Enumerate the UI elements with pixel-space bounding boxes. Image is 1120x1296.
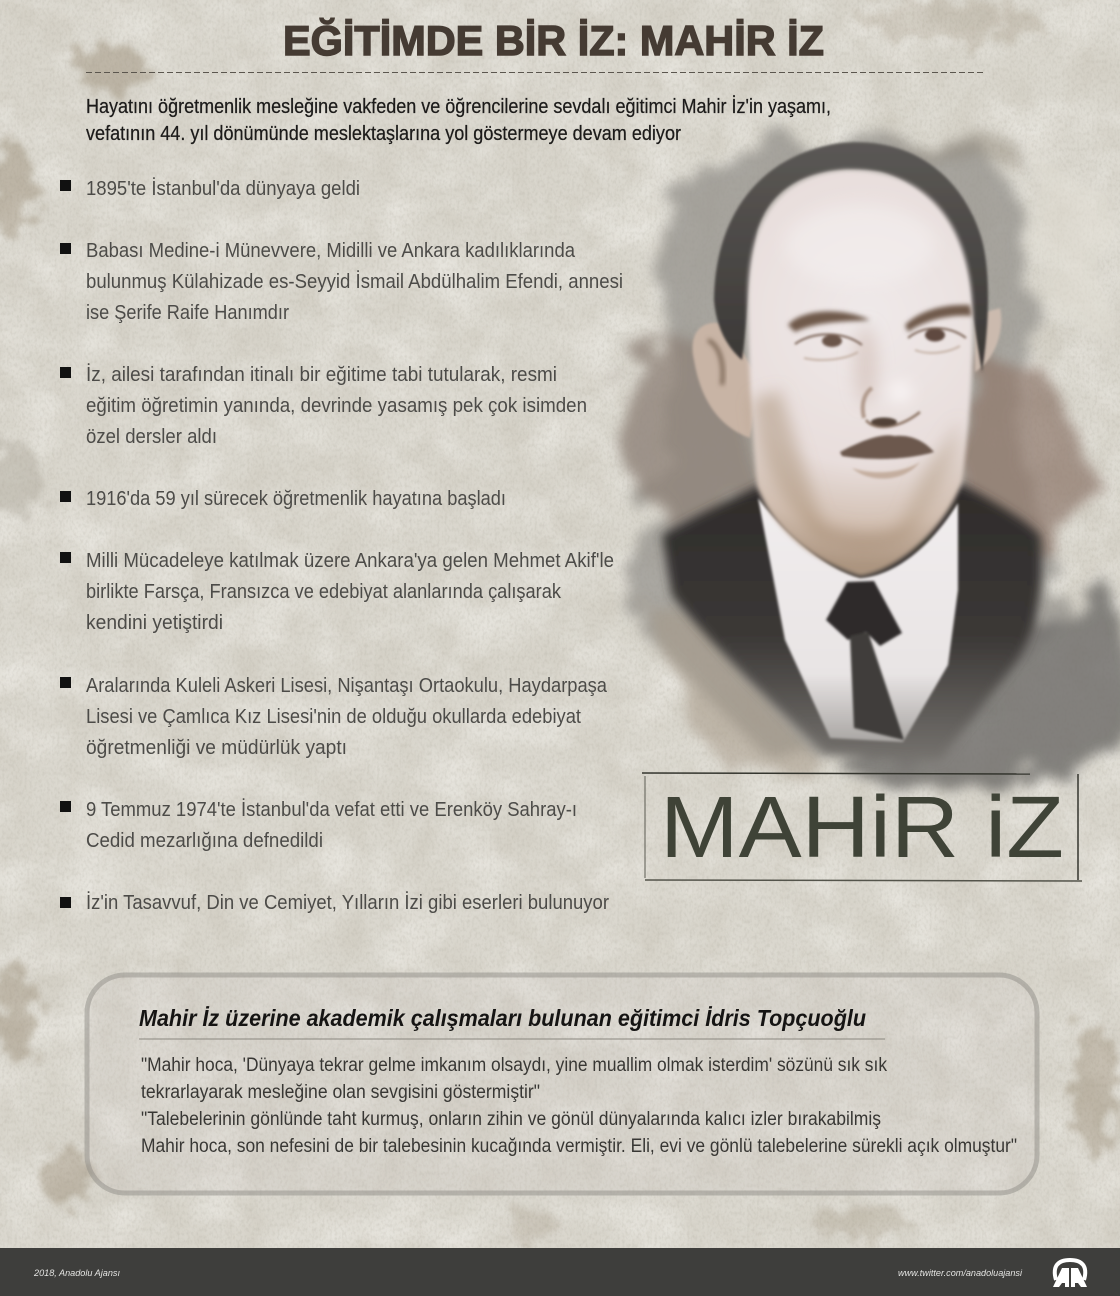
bullet 3: eğitim öğretimin yanında, devrinde yasamış pek çok isimden xyxy=(86,395,587,417)
dashed title rule xyxy=(86,72,985,74)
watercolor wash xyxy=(625,135,1120,785)
intro text: Hayatını öğretmenlik mesleğine vakfeden ve öğrencilerine sevdalı eğitimci Mahir İz'in yaşamı, xyxy=(86,95,831,118)
bullet 6: Lisesi ve Çamlıca Kız Lisesi'nin de olduğu okullarda edebiyat xyxy=(86,706,581,728)
bullet 2: Babası Medine-i Münevvere, Midilli ve Ankara kadılıklarında xyxy=(86,240,576,262)
bullet 4: 1916'da 59 yıl sürecek öğretmenlik hayatına başladı xyxy=(86,488,506,510)
bullet 3: İz, ailesi tarafından itinalı bir eğitime tabi tutularak, resmi xyxy=(86,363,557,386)
quote text xyxy=(141,1055,1017,1157)
quote text: tekrarlayarak mesleğine olan sevgisini göstermiştir" xyxy=(141,1082,540,1103)
bullet 5: Milli Mücadeleye katılmak üzere Ankara'ya gelen Mehmet Akif'le xyxy=(86,550,614,572)
bullet 7: 9 Temmuz 1974'te İstanbul'da vefat etti ve Erenköy Sahray-ı xyxy=(86,798,577,821)
bullet 5 xyxy=(60,550,614,634)
quote heading: Mahir İz üzerine akademik çalışmaları bulunan eğitimci İdris Topçuoğlu xyxy=(139,1005,866,1031)
title: EĞİTİMDE BİR İZ: MAHİR İZ xyxy=(283,17,824,64)
portrait: nose xyxy=(863,388,920,427)
bullet 8: İz'in Tasavvuf, Din ve Cemiyet, Yılların İzi gibi eserleri bulunuyor xyxy=(86,891,609,914)
bullet 5: birlikte Farsça, Fransızca ve edebiyat alanlarında çalışarak xyxy=(86,581,562,603)
portrait: suit xyxy=(662,484,1042,760)
portrait: eyebrows xyxy=(788,305,972,332)
portrait: face xyxy=(748,170,973,576)
quote text: Mahir hoca, son nefesini de bir talebesinin kucağında vermiştir. Eli, evi ve gönlü talebelerine sürekli açık olmuştur" xyxy=(141,1136,1017,1157)
icon: AA logo xyxy=(1053,1260,1087,1287)
bullet 2: bulunmuş Külahizade es-Seyyid İsmail Abdülhalim Efendi, annesi xyxy=(86,270,623,293)
bullet 7 xyxy=(60,798,577,852)
portrait: eyes xyxy=(795,328,966,360)
portrait: face shading xyxy=(752,205,960,553)
bullet 2 xyxy=(60,240,623,324)
quote text: "Talebelerinin gönlünde taht kurmuş, onların zihin ve gönül dünyalarında kalıcı izler bırakabilmiş xyxy=(141,1109,881,1130)
name plate: MAHiR iZ: MAHiR iZ xyxy=(660,779,1064,876)
portrait: hair xyxy=(714,142,988,372)
footer credit: 2018, Anadolu Ajansı xyxy=(33,1268,120,1279)
bullet list xyxy=(60,177,623,914)
intro text: vefatının 44. yıl dönümünde meslektaşlarına yol göstermeye devam ediyor xyxy=(86,123,681,145)
bullet 7: Cedid mezarlığına defnedildi xyxy=(86,830,323,852)
portrait: shirt collar xyxy=(758,498,958,742)
intro text xyxy=(86,95,831,145)
bullet 3: özel dersler aldı xyxy=(86,426,217,448)
bullet 5: kendini yetiştirdi xyxy=(86,612,223,634)
footer bar xyxy=(0,1248,1120,1296)
bullet 6: öğretmenliği ve müdürlük yaptı xyxy=(86,737,347,759)
portrait: mustache and mouth xyxy=(840,435,934,479)
footer twitter address: www.twitter.com/anadoluajansi xyxy=(898,1268,1023,1279)
quote text: "Mahir hoca, 'Dünyaya tekrar gelme imkanım olsaydı, yine muallim olmak isterdim' sözünü sık sık xyxy=(141,1055,887,1076)
bullet 1: 1895'te İstanbul'da dünyaya geldi xyxy=(86,177,360,200)
panel: quote box xyxy=(87,975,1037,1193)
portrait with watercolor backdrop xyxy=(625,135,1120,785)
bullet 3 xyxy=(60,363,587,448)
portrait: tie xyxy=(826,581,904,740)
bullet 2: ise Şerife Raife Hanımdır xyxy=(86,302,289,324)
bullet 6 xyxy=(60,675,608,759)
bullet 6: Aralarında Kuleli Askeri Lisesi, Nişantaşı Ortaokulu, Haydarpaşa xyxy=(86,675,608,697)
portrait: ears xyxy=(692,323,760,438)
